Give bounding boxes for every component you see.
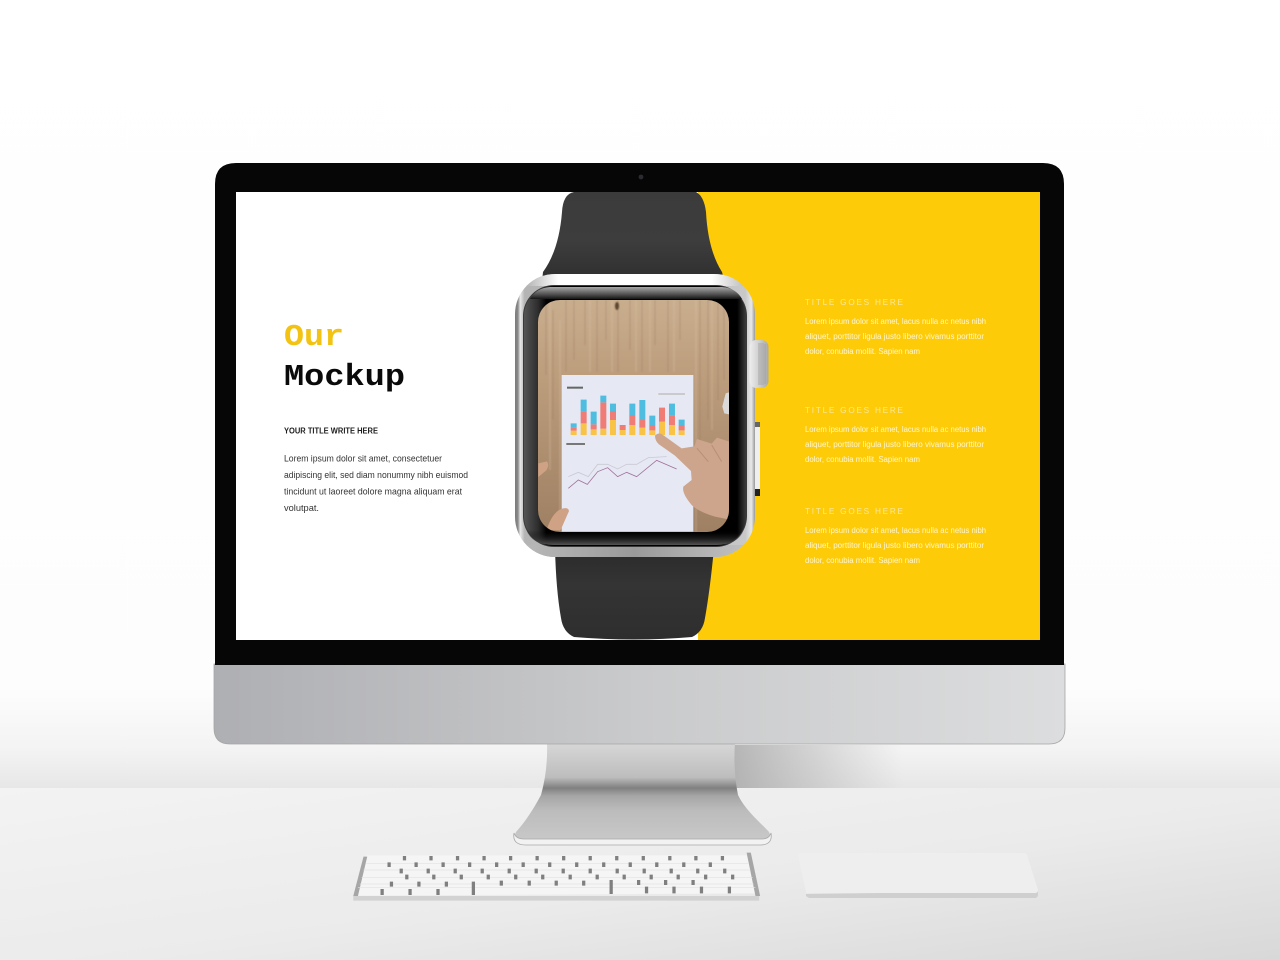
monitor chin [214,664,1065,744]
paper with charts [538,375,732,532]
text block 2: Lorem ipsum dolor sit amet, lacus nulla ac netus nibh [805,425,986,434]
text block 3: TITLE GOES HERE [805,507,904,516]
text block 3: dolor, conubia mollit. Sapien nam [805,556,920,565]
monitor [214,163,1065,744]
left hand [538,461,569,531]
slide screen [236,192,1040,640]
text block 1: dolor, conubia mollit. Sapien nam [805,347,920,356]
body text: adipiscing elit, sed diam nonummy nibh euismod [284,470,468,480]
text block 2: dolor, conubia mollit. Sapien nam [805,455,920,464]
trackpad [798,853,1038,898]
heading: Our Mockup: Our [284,320,344,355]
watch inner bezel [524,286,746,546]
side button [755,422,760,496]
text block 1: Lorem ipsum dolor sit amet, lacus nulla ac netus nibh [805,317,986,326]
heading: Our Mockup [284,320,405,395]
body text [284,454,468,513]
line chart [568,457,677,488]
digital crown [750,340,768,388]
text block 3 [805,507,986,565]
text block 2: aliquet, porttitor ligula justo libero vivamus porttitor [805,440,984,449]
body text: Lorem ipsum dolor sit amet, consectetuer [284,454,442,464]
text block 1: TITLE GOES HERE [805,298,904,307]
text block 1: aliquet, porttitor ligula justo libero vivamus porttitor [805,332,984,341]
body text: tincidunt ut laoreet dolore magna aliquam erat [284,486,462,496]
watch case [515,274,755,557]
lower strap [555,548,714,640]
camera [639,175,643,179]
text block 1 [805,298,986,356]
shadow behind stand [733,745,903,788]
keyboard [353,853,760,901]
subheading: YOUR TITLE WRITE HERE [284,426,378,436]
text block 2 [805,406,986,464]
monitor black bezel [215,163,1064,665]
body text: volutpat. [284,503,319,513]
yellow panel [698,192,1040,640]
silver object [722,392,729,414]
desk surface [0,788,1280,960]
text block 2: TITLE GOES HERE [805,406,904,415]
monitor stand [514,742,771,845]
text block 3: aliquet, porttitor ligula justo libero vivamus porttitor [805,541,984,550]
watch screen photo [538,300,732,532]
wood table [538,300,729,532]
upper strap [541,192,727,290]
heading: Our Mockup: Mockup [284,360,405,395]
text block 3: Lorem ipsum dolor sit amet, lacus nulla ac netus nibh [805,526,986,535]
watch [515,192,768,640]
stacked bar chart [571,396,685,435]
right hand [655,433,732,520]
